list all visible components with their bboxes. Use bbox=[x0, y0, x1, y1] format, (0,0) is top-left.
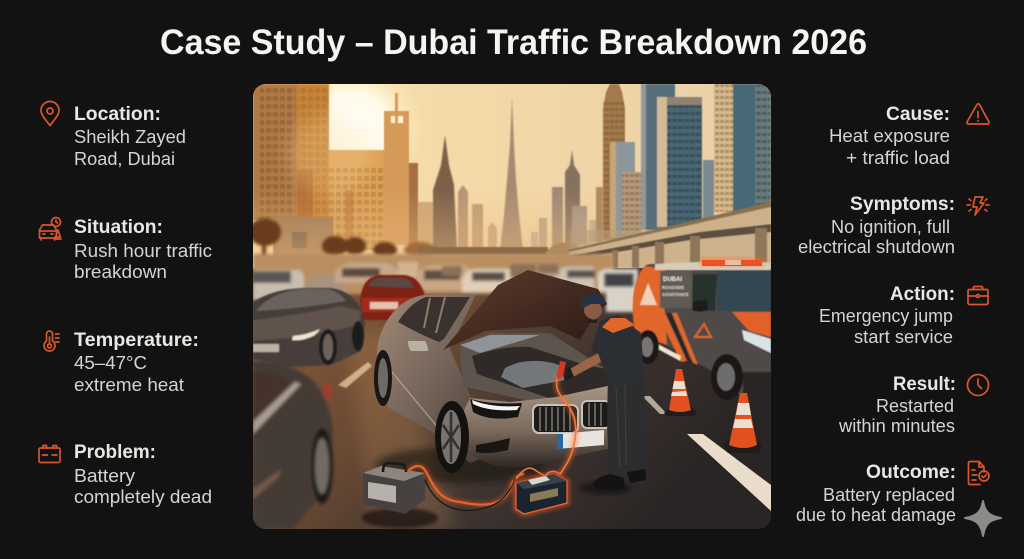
text: result detail: within minutes bbox=[838, 416, 955, 436]
heading: action: Action: bbox=[890, 284, 955, 305]
text: problem detail: completely dead bbox=[74, 487, 212, 507]
van: DUBAI bbox=[663, 277, 682, 283]
left car, foreground bbox=[253, 361, 333, 529]
jump cables bbox=[409, 372, 576, 510]
sun glare over buildings bbox=[288, 113, 372, 197]
item: cause bbox=[829, 104, 989, 168]
text: situation detail bbox=[74, 241, 212, 282]
text: location detail: Sheikh Zayed bbox=[74, 127, 186, 147]
left towers bbox=[253, 84, 418, 257]
grey jump-start battery bbox=[362, 463, 438, 528]
horizon haze bbox=[253, 200, 593, 262]
item: location bbox=[41, 102, 186, 169]
heading: situation: Situation: bbox=[74, 217, 163, 238]
text: problem detail bbox=[74, 466, 212, 507]
van: ASSISTANCE bbox=[662, 292, 689, 297]
sky bbox=[253, 84, 771, 274]
text: symptoms detail bbox=[798, 217, 955, 257]
text: situation detail: Rush hour traffic bbox=[74, 241, 212, 261]
metro bridge bbox=[418, 202, 771, 275]
heading: temperature: Temperature: bbox=[74, 330, 199, 351]
photo: Dubai roadside breakdown scene bbox=[249, 56, 771, 529]
item: situation bbox=[40, 217, 212, 282]
text: symptoms detail: No ignition, full bbox=[831, 217, 950, 237]
left car, mid distance bbox=[253, 288, 365, 367]
icon: document with check bbox=[968, 462, 989, 484]
text: symptoms detail: electrical shutdown bbox=[798, 237, 955, 257]
icon: warning triangle bbox=[967, 104, 989, 124]
icon: battery bbox=[39, 446, 60, 462]
text: outcome detail bbox=[796, 485, 956, 525]
text: location detail bbox=[74, 127, 186, 169]
text: cause detail: + traffic load bbox=[846, 148, 950, 168]
heading: problem: Problem: bbox=[74, 442, 156, 463]
text: action detail: start service bbox=[854, 327, 953, 347]
left panel: case facts bbox=[39, 102, 212, 507]
icon: electric bolt bbox=[967, 197, 989, 215]
text: temperature detail bbox=[74, 353, 184, 395]
van: ROADSIDE bbox=[662, 285, 684, 290]
text: problem detail: Battery bbox=[74, 466, 135, 486]
item: action bbox=[819, 284, 988, 347]
text: action detail: Emergency jump bbox=[819, 306, 953, 326]
red clamp bbox=[557, 361, 566, 380]
text: result detail: Restarted bbox=[876, 396, 954, 416]
icon: map pin bbox=[41, 102, 59, 126]
mechanic bbox=[561, 294, 646, 495]
text: cause detail: Heat exposure bbox=[829, 126, 950, 146]
text: location detail: Road, Dubai bbox=[74, 149, 175, 169]
sparkle watermark bbox=[965, 501, 1001, 536]
text: temperature detail: extreme heat bbox=[74, 375, 184, 395]
text: outcome detail: due to heat damage bbox=[796, 505, 956, 525]
item: problem bbox=[39, 442, 212, 507]
heading: symptoms: Symptoms: bbox=[850, 194, 955, 215]
icon: clock bbox=[968, 374, 988, 396]
icon: briefcase bbox=[968, 286, 988, 304]
title: Case Study – Dubai Traffic Breakdown 2026 bbox=[160, 23, 867, 62]
text: temperature detail: 45–47°C bbox=[74, 353, 147, 373]
text: cause detail bbox=[829, 126, 950, 168]
heading: result: Result: bbox=[893, 374, 956, 395]
main car: BMW with open bonnet bbox=[374, 270, 612, 483]
light bar bbox=[700, 257, 764, 267]
item: outcome bbox=[796, 462, 989, 525]
van bbox=[633, 262, 771, 400]
text: situation detail: breakdown bbox=[74, 262, 167, 282]
traffic jam: blurred cars bbox=[253, 254, 638, 312]
red car bbox=[360, 275, 426, 320]
text: result detail bbox=[838, 396, 955, 436]
traffic cones bbox=[664, 369, 762, 453]
icon: car in traffic with clock bbox=[40, 218, 61, 240]
item: symptoms bbox=[798, 194, 989, 257]
text: outcome detail: Battery replaced bbox=[823, 485, 955, 505]
heading: location: Location: bbox=[74, 104, 161, 125]
road markings bbox=[338, 362, 771, 511]
item: result bbox=[838, 374, 988, 436]
sun bbox=[328, 84, 413, 150]
icon: thermometer bbox=[44, 331, 59, 351]
road bbox=[253, 268, 771, 529]
text: action detail bbox=[819, 306, 953, 347]
palm trees bbox=[253, 216, 435, 256]
heading: outcome: Outcome: bbox=[866, 462, 956, 483]
heading: cause: Cause: bbox=[886, 104, 950, 125]
glowing car battery bbox=[516, 474, 567, 514]
skyline: distant buildings bbox=[418, 97, 603, 250]
right towers bbox=[603, 84, 771, 240]
item: temperature bbox=[44, 330, 199, 395]
right panel: diagnosis and resolution bbox=[796, 104, 989, 525]
